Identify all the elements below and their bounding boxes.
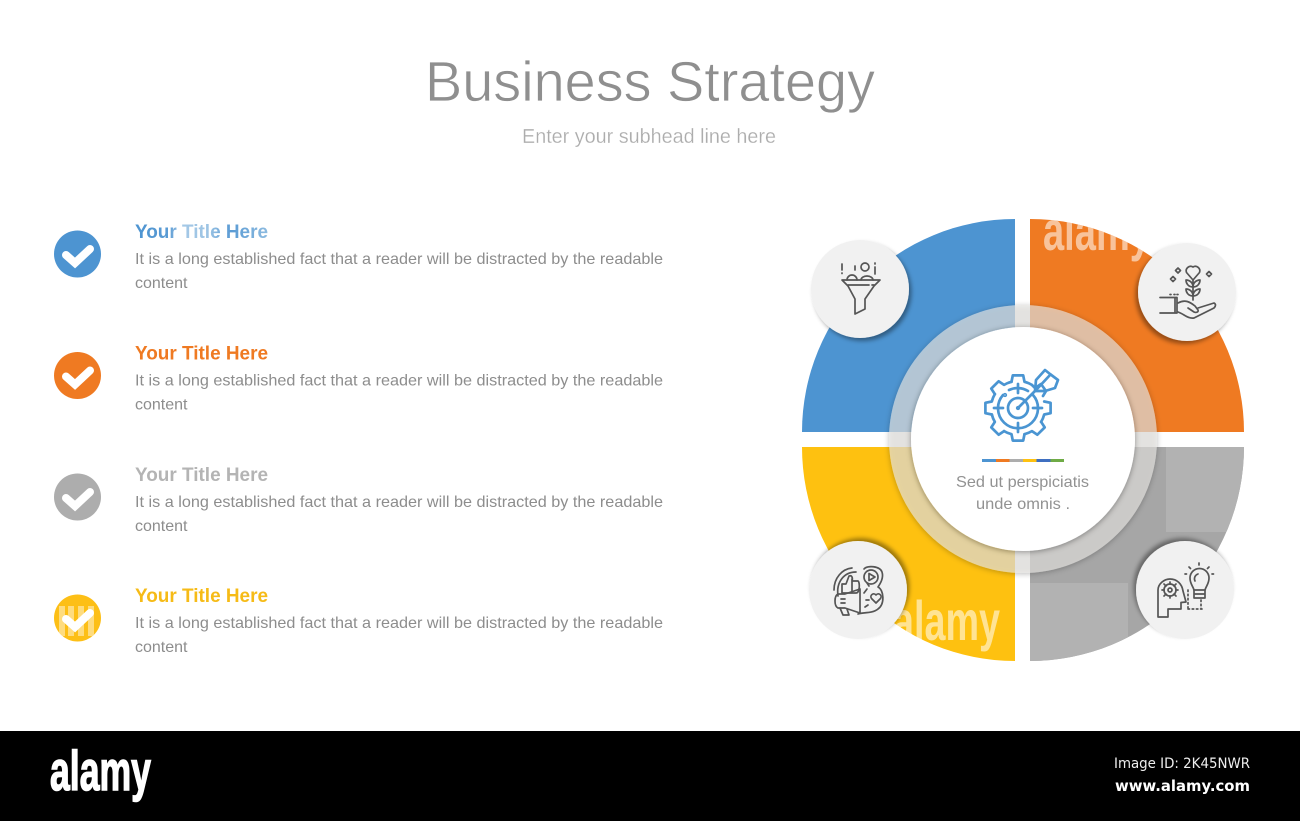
icon: blue check badge — [54, 230, 101, 278]
text: blue item: It is a long established fact that a reader will be distracted by the readable — [135, 251, 663, 268]
image id: Image ID: 2K45NWR — [1114, 756, 1250, 772]
heading: orange item: Your Title Here — [135, 344, 268, 364]
center caption: Sed ut perspiciatis — [956, 474, 1089, 491]
heading: grey item: Your Title Here — [135, 465, 268, 486]
icon: grey check badge — [54, 474, 101, 520]
text: blue item: content — [135, 275, 188, 292]
icon: target gear with arrow — [985, 370, 1058, 441]
heading: yellow item: Your Title Here — [135, 586, 268, 607]
footer url: www.alamy.com — [1115, 777, 1250, 795]
list item: blue — [54, 222, 663, 292]
text: orange item: It is a long established fact that a reader will be distracted by the readable — [135, 372, 663, 390]
text: orange item: content — [135, 396, 188, 414]
quadrant: yellow: alamy — [893, 589, 1000, 652]
text: yellow item: content — [135, 639, 188, 656]
center caption: unde omnis . — [976, 496, 1070, 513]
text: grey item: It is a long established fact that a reader will be distracted by the readable — [135, 494, 663, 511]
text: yellow item: It is a long established fact that a reader will be distracted by the readable — [135, 615, 663, 632]
text: grey item: content — [135, 518, 188, 535]
node: hand with plant — [1138, 243, 1236, 341]
quadrant: yellow — [802, 447, 1015, 661]
node: head and light bulb — [1136, 541, 1234, 639]
footer band — [0, 731, 1300, 821]
title: Business Strategy — [425, 50, 875, 114]
color bar — [982, 459, 1064, 462]
heading: blue item: Your Title Here — [135, 222, 268, 243]
quadrant: orange — [1030, 199, 1244, 432]
list item: yellow — [54, 586, 663, 656]
quadrant: blue — [802, 219, 1015, 432]
circular diagram — [802, 199, 1246, 663]
node: funnel — [811, 240, 909, 338]
icon: funnel — [842, 263, 880, 314]
icon: megaphone with social reactions — [834, 567, 883, 615]
icon: head with gear and bulb — [1158, 563, 1214, 617]
node: megaphone — [809, 541, 907, 639]
list item: orange — [54, 344, 663, 414]
icon: hand with plant — [1160, 266, 1216, 318]
subhead: Enter your subhead line here — [522, 126, 776, 148]
footer logo: alamy — [50, 739, 151, 802]
icon: orange check badge — [54, 352, 101, 399]
center disc — [911, 327, 1135, 551]
icon: yellow check badge — [54, 594, 101, 642]
quadrant: orange: alamy — [1043, 199, 1151, 262]
list item: grey — [54, 465, 663, 535]
quadrant: grey — [1030, 447, 1246, 663]
translucent ring — [900, 316, 1146, 562]
